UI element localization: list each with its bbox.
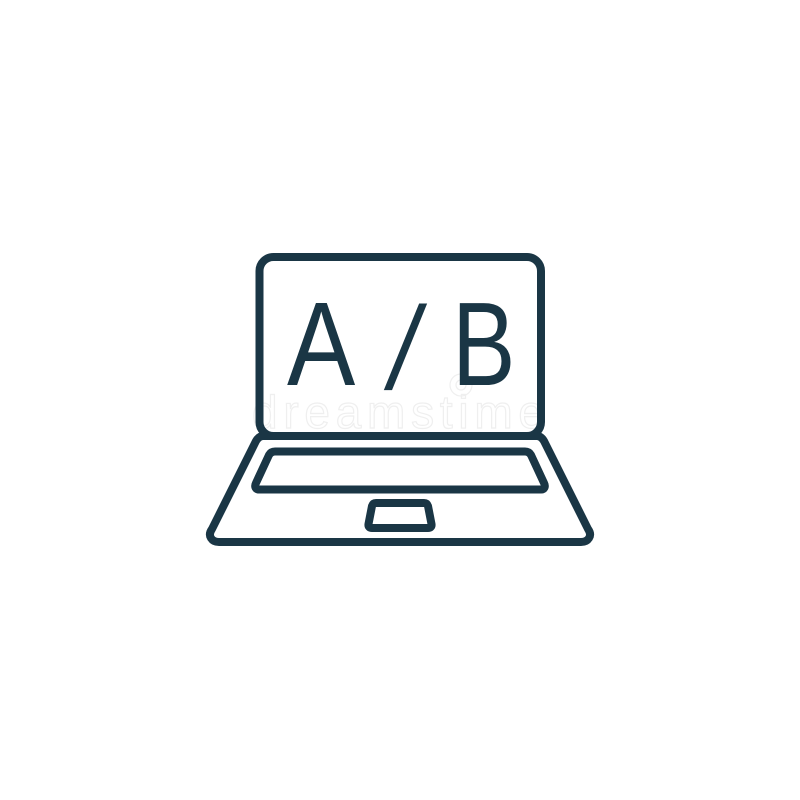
A/B label <box>287 277 515 414</box>
trackpad <box>368 503 432 528</box>
keyboard <box>255 452 545 490</box>
watermark: dreamstime <box>252 386 544 438</box>
letter A: A <box>287 278 355 411</box>
slash: / <box>380 283 431 414</box>
letter B: B <box>452 277 515 410</box>
laptop screen <box>260 257 541 436</box>
laptop base <box>210 436 590 542</box>
icon: laptop <box>210 257 590 542</box>
